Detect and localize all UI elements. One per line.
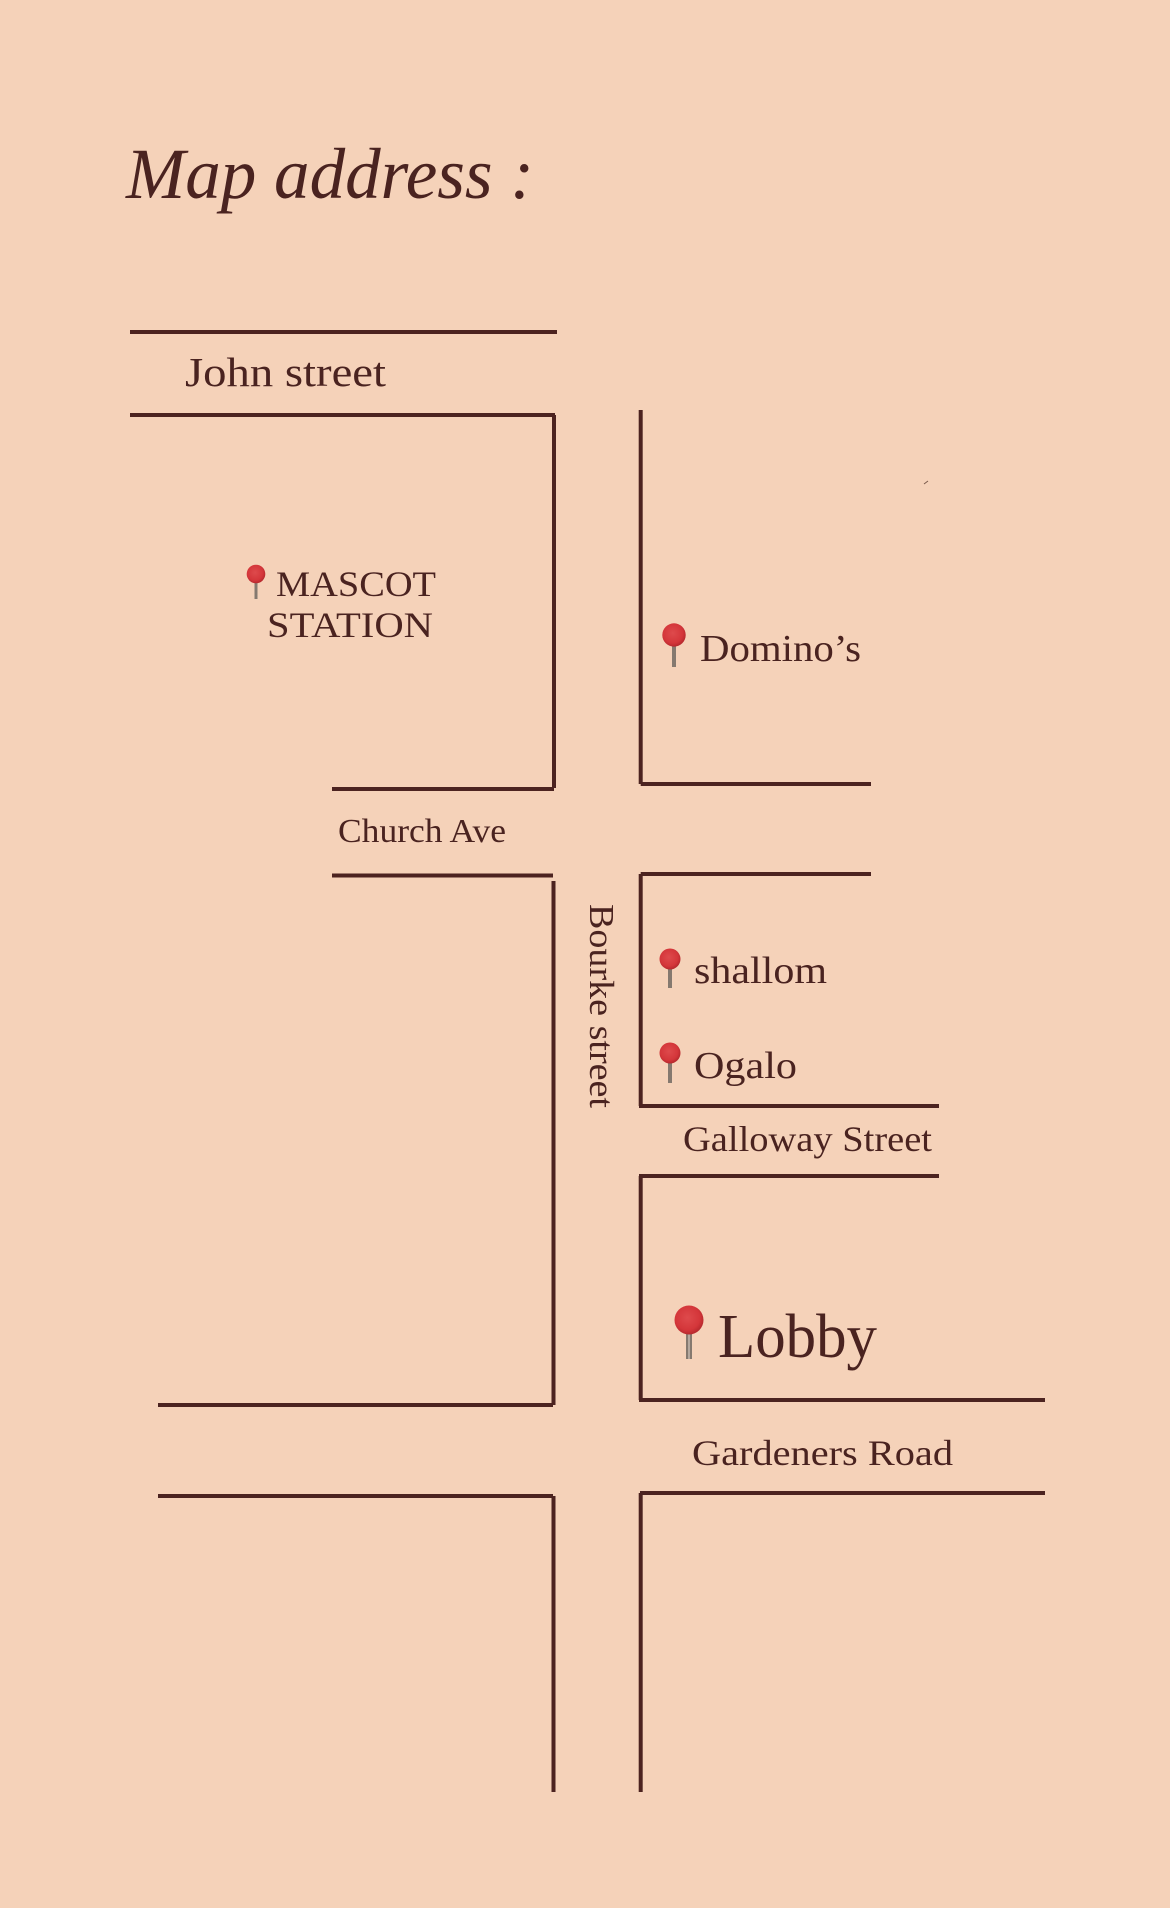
street map lines <box>130 332 1045 1792</box>
label: Bourke street: Bourke street <box>582 904 621 1108</box>
icon: pin Mascot Station <box>247 565 265 599</box>
title: Map address : <box>125 134 534 214</box>
label: Mascot Station <box>267 564 436 645</box>
label: Mascot Station: MASCOT <box>276 564 436 604</box>
label: Lobby: Lobby <box>718 1303 877 1371</box>
icon: pin shallom <box>660 948 680 988</box>
label: Gardeners Road: Gardeners Road <box>692 1433 953 1473</box>
label: shallom: shallom <box>694 950 827 992</box>
label: Mascot Station: STATION <box>267 605 433 645</box>
label: Ogalo: Ogalo <box>694 1045 797 1087</box>
icon: pin Ogalo <box>660 1042 680 1083</box>
label: Church Ave: Church Ave <box>338 813 506 850</box>
icon: pin Domino's <box>662 623 686 667</box>
label: Galloway Street: Galloway Street <box>683 1119 932 1159</box>
icon: pin Lobby <box>674 1306 704 1359</box>
label: John street: John street <box>185 349 387 395</box>
label: Domino's: Domino’s <box>700 628 861 670</box>
